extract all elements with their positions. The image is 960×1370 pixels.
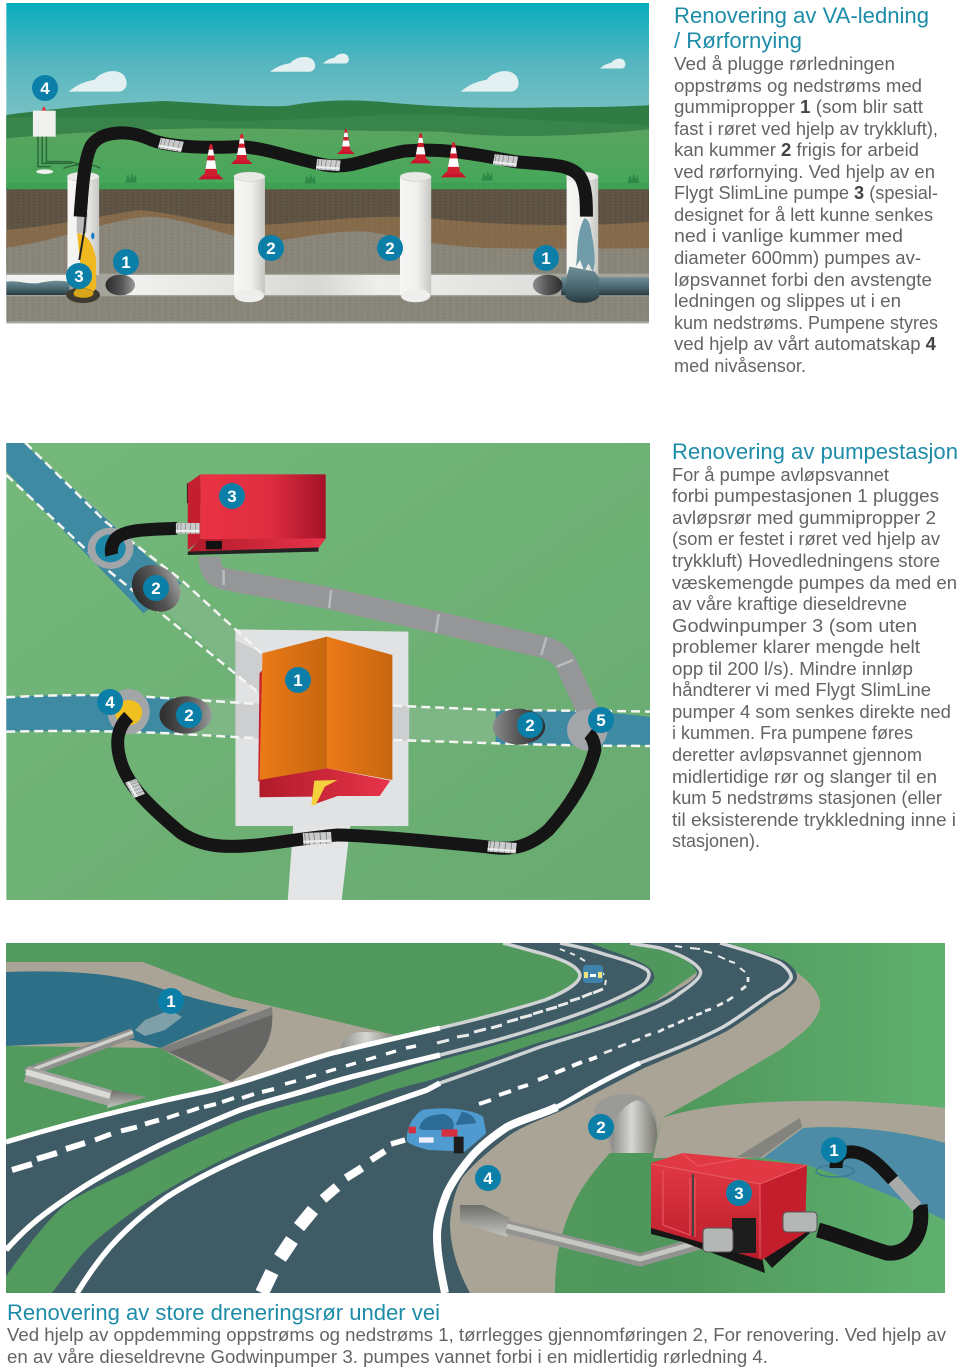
pump couplings xyxy=(703,1212,817,1252)
sky xyxy=(6,3,650,136)
clouds xyxy=(69,54,625,92)
road tunnel opening xyxy=(593,1094,658,1153)
number badges panel 2 xyxy=(97,483,614,738)
soil layers xyxy=(6,189,650,323)
bypass pipe upper left xyxy=(26,1010,182,1108)
text block: Renovering av pumpestasjon: Godwinpumper 3 (som uten xyxy=(672,616,917,636)
upper manhole xyxy=(88,528,133,569)
lane markings upper road xyxy=(12,949,606,1170)
right lake xyxy=(763,1127,945,1220)
text block: Renovering av pumpestasjon: avløpsrør med gummipropper 2 xyxy=(672,508,936,528)
number badges panel 2: 2 xyxy=(525,716,535,735)
text block: Renovering av pumpestasjon: midlertidige rør og slanger til en xyxy=(672,767,937,787)
diesel pump xyxy=(187,474,326,555)
text block: Renovering av pumpestasjon: pumper 4 som senkes direkte ned xyxy=(672,702,951,722)
text block: Renovering av pumpestasjon: i kummen. Fra pumpene føres xyxy=(672,723,913,743)
control cabinet with sensor xyxy=(33,106,100,174)
upper inlet pipe xyxy=(6,443,236,672)
main underground pipe xyxy=(6,274,650,296)
suction hose xyxy=(111,528,177,555)
number badges panel 2: 5 xyxy=(596,711,606,730)
number badges panel 3: 4 xyxy=(483,1169,493,1188)
outlet water xyxy=(576,218,595,272)
upper road white edges xyxy=(6,943,649,1250)
text block: Renovering av VA-ledning: kan kummer 2 frigis for arbeid xyxy=(674,140,919,160)
main sewer line xyxy=(6,695,652,745)
grass tufts xyxy=(126,171,639,183)
number badges panel 2: 4 xyxy=(105,693,115,712)
text block: Renovering av pumpestasjon: forbi pumpestasjonen 1 plugges xyxy=(672,486,939,506)
left lake xyxy=(6,971,248,1048)
number badges panel 3: 1 xyxy=(829,1141,839,1160)
access road xyxy=(288,826,350,900)
left dam wall xyxy=(160,1007,272,1082)
text block: Renovering av VA-ledning: fast i røret ved hjelp av trykkluft), xyxy=(674,119,938,139)
number badges panel 1: 2 xyxy=(385,239,395,258)
text block: Renovering av pumpestasjon: problemer klarer mengde helt xyxy=(672,637,920,657)
green ground xyxy=(6,443,652,900)
right embankment xyxy=(653,1101,945,1158)
lower road surface xyxy=(52,943,797,1293)
number badges panel 2: 1 xyxy=(293,671,303,690)
traffic cones front xyxy=(198,133,466,179)
number badges panel 1: 3 xyxy=(74,267,84,286)
text block: Renovering av VA-ledning: gummipropper 1 (som blir satt xyxy=(674,97,923,117)
text block: Renovering av pumpestasjon: av våre kraftige dieseldrevne xyxy=(672,594,907,614)
number badges panel 3: 1 xyxy=(166,992,176,1011)
number badges panel 2: 2 xyxy=(184,706,194,725)
text block: Renovering av VA-ledning: Ved å plugge rørledningen xyxy=(674,54,895,74)
text block: Renovering av VA-ledning: designet for å lett kunne senkes xyxy=(674,205,933,225)
left culvert opening xyxy=(339,1032,400,1058)
number badges panel 1 xyxy=(32,75,559,289)
green ground xyxy=(6,943,945,1293)
number badges panel 3: 2 xyxy=(596,1118,606,1137)
dashed pipe outlines xyxy=(6,443,652,746)
text block: Renovering av pumpestasjon: opp til 200 l/s). Mindre innløp xyxy=(672,659,913,679)
text block: Renovering av VA-ledning: ved rørfornying. Ved hjelp av en xyxy=(674,162,935,182)
text block: Renovering av VA-ledning: ved hjelp av vårt automatskap 4 xyxy=(674,334,936,354)
discharge pipe xyxy=(460,1205,710,1260)
manholes xyxy=(66,172,599,303)
text block: Renovering av VA-ledning xyxy=(674,3,938,376)
suction hose xyxy=(818,1152,921,1253)
blue car xyxy=(407,1108,486,1153)
text block: Renovering av VA-ledning: / Rørfornying xyxy=(674,28,802,53)
red godwin pump xyxy=(651,1153,810,1273)
station plot xyxy=(235,629,408,826)
text block: Renovering av VA-ledning: diameter 600mm) pumpes av- xyxy=(674,248,921,268)
number badges panel 1: 1 xyxy=(541,249,551,268)
text block: Renovering av VA-ledning: oppstrøms og nedstrøms med xyxy=(674,76,922,96)
text block: Renovering av store dreneringsrør under vei: en av våre dieseldrevne Godwinpumper 3. pumpes vannet forbi i en midlertidig rørledning 4. xyxy=(7,1347,768,1367)
text block: Renovering av pumpestasjon: håndterer vi med Flygt SlimLine xyxy=(672,680,931,700)
text block: Renovering av pumpestasjon: væskemengde pumpes da med en xyxy=(672,573,957,593)
number badges panel 2: 2 xyxy=(151,579,161,598)
text block: Renovering av pumpestasjon: trykkluft) Hovedledningens store xyxy=(672,551,940,571)
text block: Renovering av VA-ledning: Renovering av VA-ledning xyxy=(674,3,929,28)
lower road white edges xyxy=(77,943,791,1293)
lower embankment xyxy=(440,968,820,1293)
right dam wall xyxy=(737,1118,802,1158)
text block: Renovering av VA-ledning: løpsvannet forbi den avstengte xyxy=(674,270,932,290)
text block: Renovering av pumpestasjon: stasjonen). xyxy=(672,831,760,851)
text block: Renovering av pumpestasjon: til eksisterende trykkledning inne i xyxy=(672,810,956,830)
bypass hose xyxy=(118,717,595,848)
gray pipe band on plot xyxy=(235,640,409,741)
upper road surface xyxy=(6,943,654,1276)
panel: drainage pipe under road xyxy=(6,943,945,1293)
text block: Renovering av pumpestasjon: (som er festet i røret ved hjelp av xyxy=(672,529,940,549)
rubber plugs xyxy=(124,559,545,745)
number badges panel 1: 4 xyxy=(40,79,50,98)
panel: pipe renovation illustration xyxy=(6,3,650,323)
text block: Renovering av VA-ledning: ledningen og slippes ut i en xyxy=(674,291,901,311)
pressure pipe xyxy=(210,557,595,727)
text block: Renovering av pumpestasjon: Renovering av pumpestasjon xyxy=(672,439,958,464)
text block: Renovering av VA-ledning: kum nedstrøms. Pumpene styres xyxy=(674,313,938,333)
hose couplings xyxy=(158,138,518,171)
panel: pump station plan view xyxy=(6,443,652,900)
water ripple xyxy=(816,1165,854,1177)
text block: Renovering av pumpestasjon: For å pumpe avløpsvannet xyxy=(672,465,889,485)
text block: Renovering av pumpestasjon: deretter avløpsvannet gjennom xyxy=(672,745,922,765)
text block: Renovering av VA-ledning: Flygt SlimLine pumpe 3 (spesial- xyxy=(674,183,938,203)
number badges panel 3: 3 xyxy=(734,1184,744,1203)
text block: Renovering av pumpestasjon: kum 5 nedstrøms stasjonen (eller xyxy=(672,788,942,808)
hills xyxy=(6,100,650,191)
traffic cones back xyxy=(337,129,355,154)
number badges panel 3 xyxy=(158,988,847,1206)
inlet manhole with pump xyxy=(108,689,150,734)
number badges panel 2: 3 xyxy=(227,487,237,506)
upper embankment xyxy=(6,962,403,1085)
rubber plugs xyxy=(105,275,562,295)
text block: Renovering av pumpestasjon xyxy=(672,439,958,851)
slimline pump xyxy=(73,200,96,298)
text block: Renovering av store dreneringsrør under vei: Renovering av store dreneringsrør under vei xyxy=(7,1300,440,1325)
number badges panel 1: 1 xyxy=(121,253,131,272)
text block: Renovering av VA-ledning: ned i vanlige kummer med xyxy=(674,226,903,246)
outlet manhole xyxy=(567,709,608,751)
text block: Renovering av store dreneringsrør under vei: Ved hjelp av oppdemming oppstrøms og nedstrøms 1, tørrlegges gjennomføringen 2, For renovering. Ved hjelp av xyxy=(7,1325,946,1345)
overland hose xyxy=(80,133,586,217)
text block: Renovering av store dreneringsrør under vei xyxy=(7,1300,946,1367)
number badges panel 1: 2 xyxy=(266,239,276,258)
far car xyxy=(583,965,603,983)
text block: Renovering av VA-ledning: med nivåsensor. xyxy=(674,356,806,376)
hose couplings xyxy=(125,523,517,854)
lane markings lower road xyxy=(262,946,748,1293)
pump station building xyxy=(258,637,392,805)
